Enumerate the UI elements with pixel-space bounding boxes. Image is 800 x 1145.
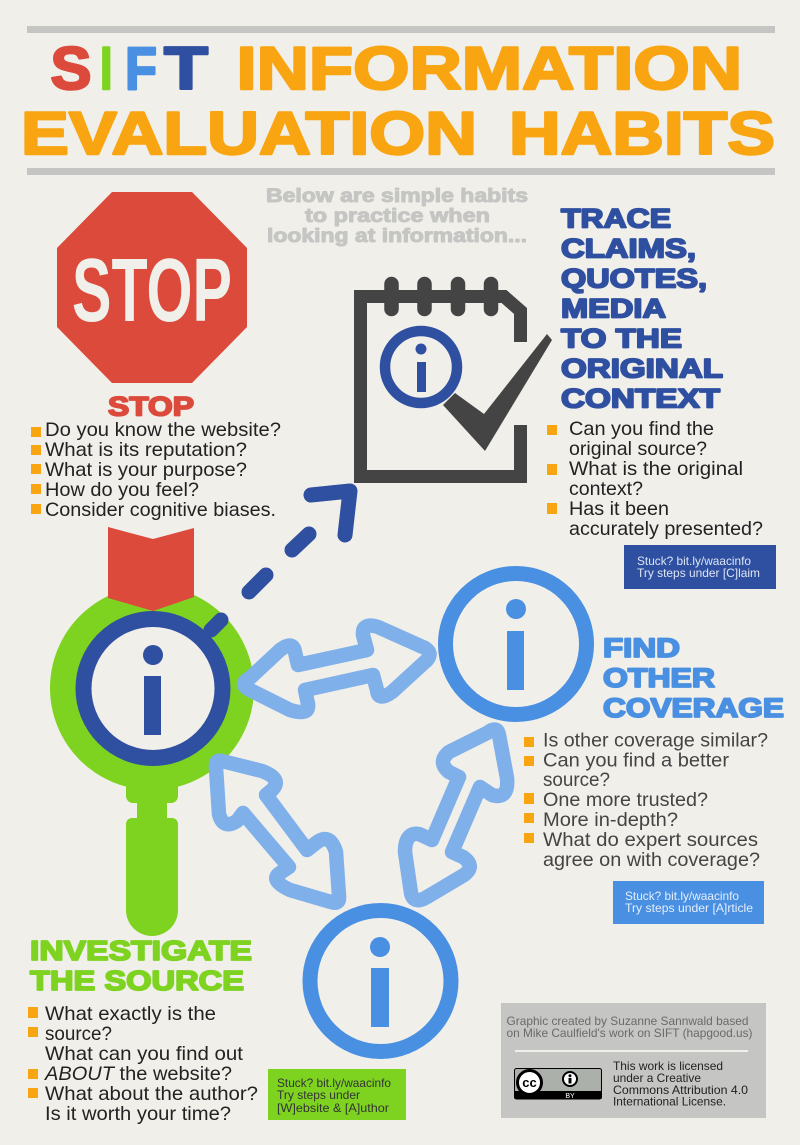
callout: article xyxy=(613,881,764,924)
find coverage checklist: Is other coverage similar? xyxy=(543,730,768,752)
find coverage checklist: More in-depth? xyxy=(543,809,678,831)
stop checklist xyxy=(31,419,281,521)
intro text: Below are simple habits xyxy=(266,185,528,207)
icon: info circle, find coverage xyxy=(446,574,586,714)
heading: trace claims xyxy=(561,204,723,414)
investigate checklist: What exactly is the xyxy=(45,1003,216,1025)
stop checklist: Do you know the website? xyxy=(45,419,281,441)
find coverage checklist xyxy=(524,730,768,871)
trace checklist xyxy=(547,418,763,540)
heading: find other coverage: OTHER xyxy=(603,663,715,693)
callout: article: Try steps under [A]rticle xyxy=(625,901,753,915)
find coverage checklist: source? xyxy=(543,769,610,791)
heading: trace claims: CONTEXT xyxy=(561,384,720,414)
title: EVALUATION xyxy=(21,100,477,167)
credit text: on Mike Caulfield's work on SIFT (hapgood.us) xyxy=(506,1026,752,1040)
heading: find other coverage: COVERAGE xyxy=(603,693,784,723)
heading: trace claims: TRACE xyxy=(561,204,671,234)
investigate checklist xyxy=(28,1003,258,1125)
callout: website and author: Try steps under xyxy=(277,1088,360,1102)
heading: trace claims: ORIGINAL xyxy=(561,354,723,384)
heading: find other coverage: FIND xyxy=(603,633,680,663)
panel: trace claims xyxy=(547,204,776,589)
trace checklist: Has it been xyxy=(569,498,669,520)
intro text: looking at information... xyxy=(267,225,527,247)
panel: investigate the source xyxy=(28,935,406,1125)
license text xyxy=(613,1059,748,1108)
arrow: bottom circle to find other coverage xyxy=(405,729,507,900)
heading: investigate the source xyxy=(30,935,252,996)
intro text: to practice when xyxy=(305,205,490,227)
title: F xyxy=(125,35,157,102)
credit text xyxy=(506,1014,752,1040)
title: INFORMATION xyxy=(236,35,742,102)
credit text: Graphic created by Suzanne Sannwald based xyxy=(506,1014,748,1028)
icon: stop sign: STOP xyxy=(72,241,232,341)
trace checklist: Can you find the xyxy=(569,418,714,440)
title: HABITS xyxy=(509,100,775,167)
icon: info circle, bottom xyxy=(310,910,451,1052)
callout: claim xyxy=(624,545,776,589)
callout: website and author: Stuck? bit.ly/waacinfo xyxy=(277,1076,391,1090)
stop checklist: What is its reputation? xyxy=(45,439,247,461)
icon: cc by badge: cc xyxy=(522,1075,537,1090)
investigate checklist: Is it worth your time? xyxy=(45,1103,231,1125)
title: I xyxy=(100,35,112,102)
heading: trace claims: TO THE xyxy=(561,324,682,354)
arrow: magnifier to find other coverage xyxy=(244,626,430,712)
trace checklist: accurately presented? xyxy=(569,518,763,540)
title xyxy=(21,35,775,167)
stop checklist: Consider cognitive biases. xyxy=(45,499,276,521)
title: S xyxy=(50,35,92,102)
panel: credits and license xyxy=(501,1003,766,1118)
license text: This work is licensed xyxy=(613,1059,723,1073)
investigate checklist: ABOUT the website? xyxy=(44,1063,232,1085)
title: T xyxy=(164,35,208,102)
heading: investigate the source: INVESTIGATE xyxy=(30,935,252,966)
find coverage checklist: One more trusted? xyxy=(543,789,708,811)
investigate checklist: What about the author? xyxy=(45,1083,258,1105)
investigate checklist: What can you find out xyxy=(45,1043,244,1065)
heading: trace claims: CLAIMS, xyxy=(561,234,696,264)
callout: article: Stuck? bit.ly/waacinfo xyxy=(625,889,739,903)
intro text xyxy=(266,185,528,247)
trace checklist: What is the original xyxy=(569,458,743,480)
find coverage checklist: What do expert sources xyxy=(543,829,758,851)
heading: investigate the source: THE SOURCE xyxy=(30,965,244,996)
callout: claim: Stuck? bit.ly/waacinfo xyxy=(637,554,751,568)
icon: cc by badge: BY xyxy=(565,1093,575,1100)
license text: Commons Attribution 4.0 xyxy=(613,1083,748,1097)
icon: cc by badge xyxy=(514,1068,602,1100)
heading: find other coverage xyxy=(603,633,784,723)
arrow: magnifier to bottom circle xyxy=(216,761,339,903)
panel: find other coverage xyxy=(524,633,784,924)
panel: stop xyxy=(31,392,281,521)
icon: green magnifier xyxy=(50,527,254,936)
trace checklist: context? xyxy=(569,478,643,500)
heading: trace claims: QUOTES, xyxy=(561,264,707,294)
license text: International License. xyxy=(613,1094,726,1108)
find coverage checklist: agree on with coverage? xyxy=(543,849,760,871)
callout: website and author xyxy=(268,1069,406,1120)
find coverage checklist: Can you find a better xyxy=(543,750,730,772)
investigate checklist: source? xyxy=(45,1023,112,1045)
stop checklist: What is your purpose? xyxy=(45,459,247,481)
stop checklist: How do you feel? xyxy=(45,479,199,501)
icon: stop sign xyxy=(57,192,247,383)
icon: calendar with check and info xyxy=(360,284,552,476)
callout: claim: Try steps under [C]laim xyxy=(637,566,760,580)
heading: trace claims: MEDIA xyxy=(561,294,666,324)
heading: stop: STOP xyxy=(108,392,194,422)
arrow: dashed to calendar xyxy=(249,491,350,592)
trace checklist: original source? xyxy=(569,438,707,460)
callout: website and author: [W]ebsite & [A]uthor xyxy=(277,1101,389,1115)
license text: under a Creative xyxy=(613,1071,701,1085)
